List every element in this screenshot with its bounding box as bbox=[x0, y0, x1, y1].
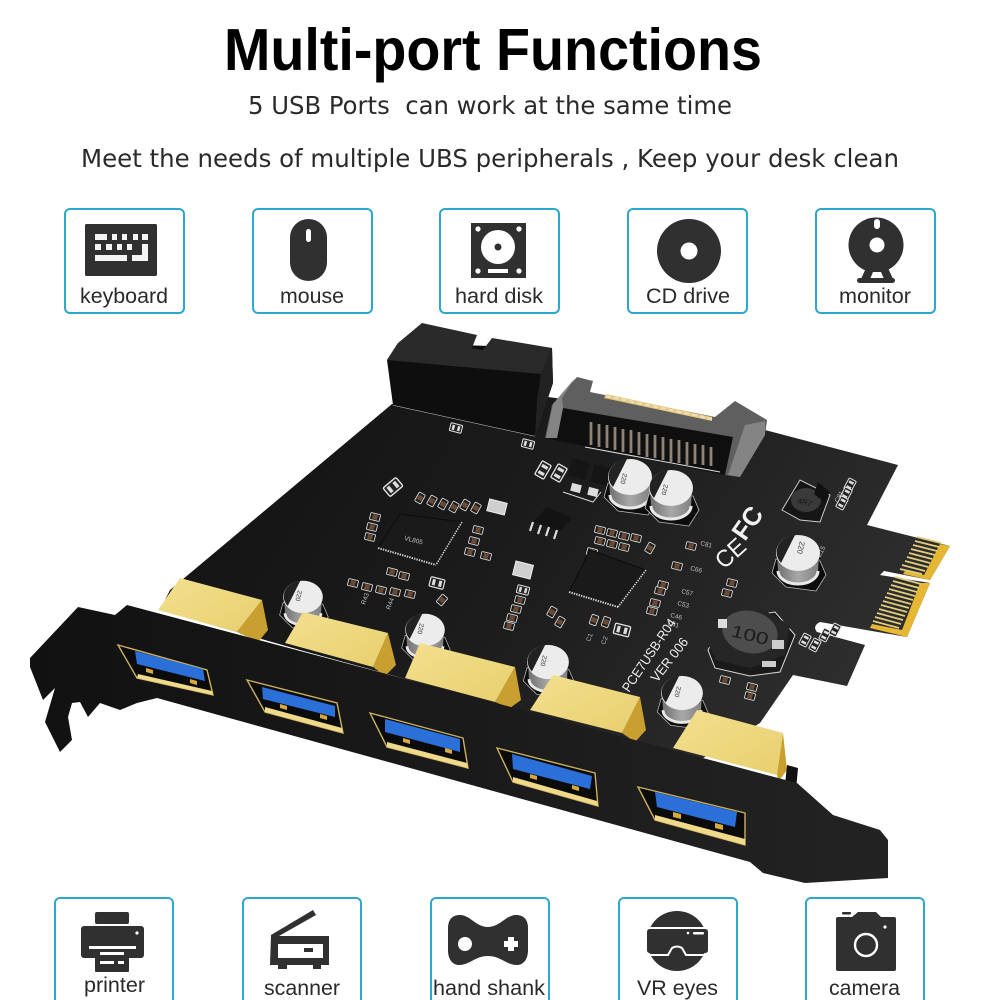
icon: printer bbox=[81, 912, 144, 972]
USB port 5 bbox=[638, 787, 745, 845]
card: printer: printer bbox=[84, 974, 145, 997]
board silkscreen and SMD parts: C2 bbox=[600, 635, 610, 646]
capacitors: 220 bbox=[672, 686, 682, 698]
connector: 19-pin USB header bbox=[387, 323, 553, 436]
subtitle line 2: Meet the needs of multiple UBS peripherals , Keep your desk clean bbox=[81, 144, 899, 173]
USB port 1 bbox=[118, 645, 213, 695]
card: camera: camera bbox=[829, 977, 900, 1000]
card: hard disk: hard disk bbox=[455, 285, 544, 308]
subtitle line 1: 5 USB Ports can work at the same time bbox=[248, 91, 732, 120]
board marking: model number: PCE7USB-R04 bbox=[619, 615, 679, 695]
inductor: 100 bbox=[729, 621, 771, 649]
board silkscreen and SMD parts bbox=[347, 405, 856, 701]
chip: main controller 1: VL805 bbox=[404, 535, 424, 547]
board silkscreen and SMD parts: C91 bbox=[834, 490, 846, 504]
board silkscreen and SMD parts: C15 bbox=[816, 545, 828, 559]
chip: main controller 2 bbox=[569, 550, 646, 607]
card: keyboard: keyboard bbox=[80, 285, 168, 308]
card: mouse: mouse bbox=[280, 285, 344, 308]
product: PCIe USB card bbox=[30, 323, 950, 883]
board silkscreen and SMD parts: C81 bbox=[700, 540, 713, 550]
USB port 3 bbox=[370, 713, 468, 768]
icon: keyboard bbox=[85, 224, 157, 276]
card: VR eyes bbox=[619, 898, 737, 1000]
icon: mouse bbox=[290, 219, 327, 281]
card: scanner: scanner bbox=[264, 977, 340, 1000]
capacitors bbox=[280, 459, 826, 729]
card: hand shank bbox=[431, 898, 549, 1000]
capacitors: 220 bbox=[659, 484, 669, 496]
logo: CE: CE bbox=[710, 533, 752, 574]
inductor: 4R7: 4R7 bbox=[797, 496, 813, 509]
inductor: 4R7 bbox=[782, 480, 830, 522]
icon: webcam monitor bbox=[848, 218, 904, 283]
USB port 4 bbox=[497, 748, 598, 806]
board silkscreen and SMD parts: R43 bbox=[360, 592, 371, 606]
logo: FCC: FC bbox=[725, 500, 770, 545]
icon: hard disk bbox=[471, 223, 526, 278]
title: Multi-port Functions bbox=[224, 17, 762, 83]
USB port 2 bbox=[247, 680, 343, 733]
board silkscreen and SMD parts: C41 bbox=[667, 620, 680, 630]
chip: main controller 1 bbox=[378, 514, 462, 565]
inductor bbox=[706, 605, 795, 676]
card: camera bbox=[806, 898, 924, 1000]
icon: CD bbox=[657, 219, 721, 283]
card: CD drive bbox=[628, 209, 747, 313]
icon: scanner bbox=[270, 910, 329, 969]
PCIe gold fingers bbox=[870, 537, 950, 637]
board silkscreen and SMD parts: C66 bbox=[690, 565, 703, 575]
card: hand shank: hand shank bbox=[433, 977, 546, 1000]
USB connector gold shells bbox=[158, 578, 798, 790]
card: printer bbox=[55, 898, 173, 1000]
capacitors: 220 bbox=[415, 623, 425, 635]
card: monitor: monitor bbox=[839, 285, 911, 308]
chip: SOP8 bbox=[530, 507, 572, 539]
connector: SATA power bbox=[545, 377, 767, 477]
board silkscreen and SMD parts: R44 bbox=[385, 597, 396, 611]
card: CD drive: CD drive bbox=[646, 285, 730, 308]
card: keyboard bbox=[65, 209, 184, 313]
capacitors: 220 bbox=[538, 655, 548, 667]
board silkscreen and SMD parts: C53 bbox=[677, 600, 690, 610]
card: VR eyes: VR eyes bbox=[637, 977, 718, 1000]
card: monitor bbox=[816, 209, 935, 313]
icon: VR headset bbox=[640, 911, 715, 971]
capacitors: 220 bbox=[795, 541, 807, 555]
capacitors: 220 bbox=[618, 473, 628, 485]
board marking: version: VER 006 bbox=[648, 635, 691, 685]
metal bracket bbox=[30, 605, 888, 883]
icon: camera bbox=[836, 912, 896, 971]
card: hard disk bbox=[440, 209, 559, 313]
board silkscreen and SMD parts: C46 bbox=[670, 612, 683, 622]
icon: gamepad bbox=[448, 915, 528, 965]
card: scanner bbox=[243, 898, 361, 1000]
capacitors: 220 bbox=[293, 590, 303, 602]
circuit board bbox=[160, 397, 950, 760]
board silkscreen and SMD parts: C1 bbox=[585, 632, 595, 643]
card: mouse bbox=[253, 209, 372, 313]
board silkscreen and SMD parts: C57 bbox=[681, 588, 694, 598]
